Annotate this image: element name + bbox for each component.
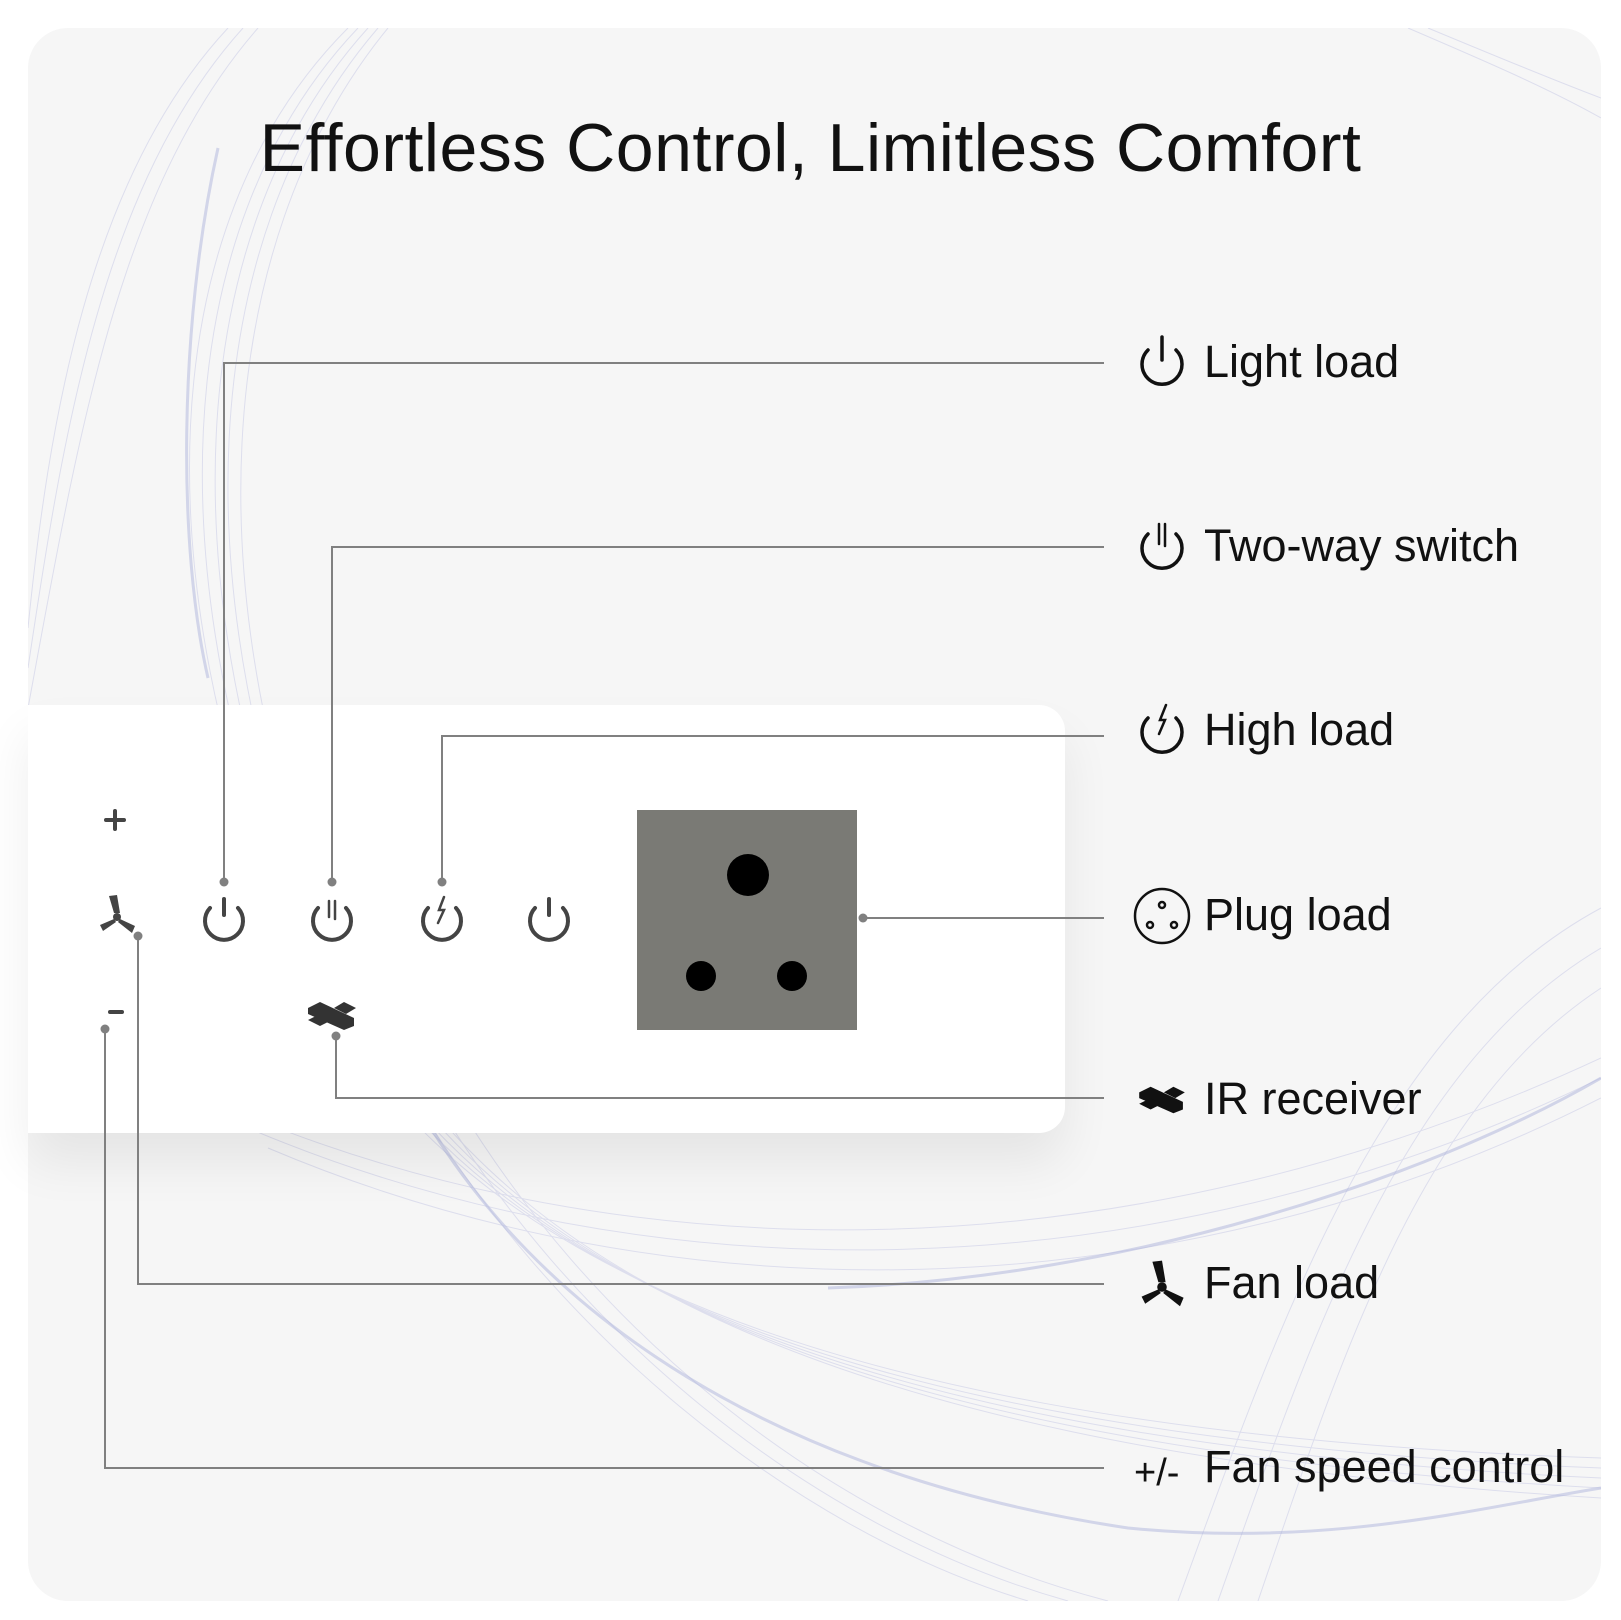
socket: [637, 810, 857, 1030]
icon: high load: [1142, 705, 1182, 752]
icon: +/-: +/-: [1134, 1452, 1179, 1494]
icon: IR: [1139, 1087, 1185, 1113]
title: Effortless Control, Limitless Comfort: [260, 110, 1361, 186]
panel: switch plate: [28, 705, 1065, 1133]
icon: two-way: [1142, 524, 1182, 568]
IR icon: [308, 1002, 356, 1030]
high load icon: [423, 897, 461, 940]
label: fan speed control: Fan speed control: [1204, 1441, 1564, 1492]
icon: light load: [1142, 337, 1182, 384]
label: light load: Light load: [1204, 336, 1399, 387]
minus: [110, 1010, 122, 1014]
label: high load: High load: [1204, 704, 1394, 755]
icon: fan: [1142, 1261, 1184, 1306]
fan icon: [100, 895, 135, 933]
icon: plug load: [1135, 889, 1189, 943]
label: plug load: Plug load: [1204, 889, 1392, 940]
label: two-way switch: Two-way switch: [1204, 520, 1519, 571]
power icon 1: [205, 899, 243, 940]
plus: [106, 811, 124, 829]
two-way icon: [313, 901, 351, 940]
label: fan load: Fan load: [1204, 1257, 1379, 1308]
power icon 2: [530, 899, 568, 940]
label: IR receiver: IR receiver: [1204, 1073, 1422, 1124]
